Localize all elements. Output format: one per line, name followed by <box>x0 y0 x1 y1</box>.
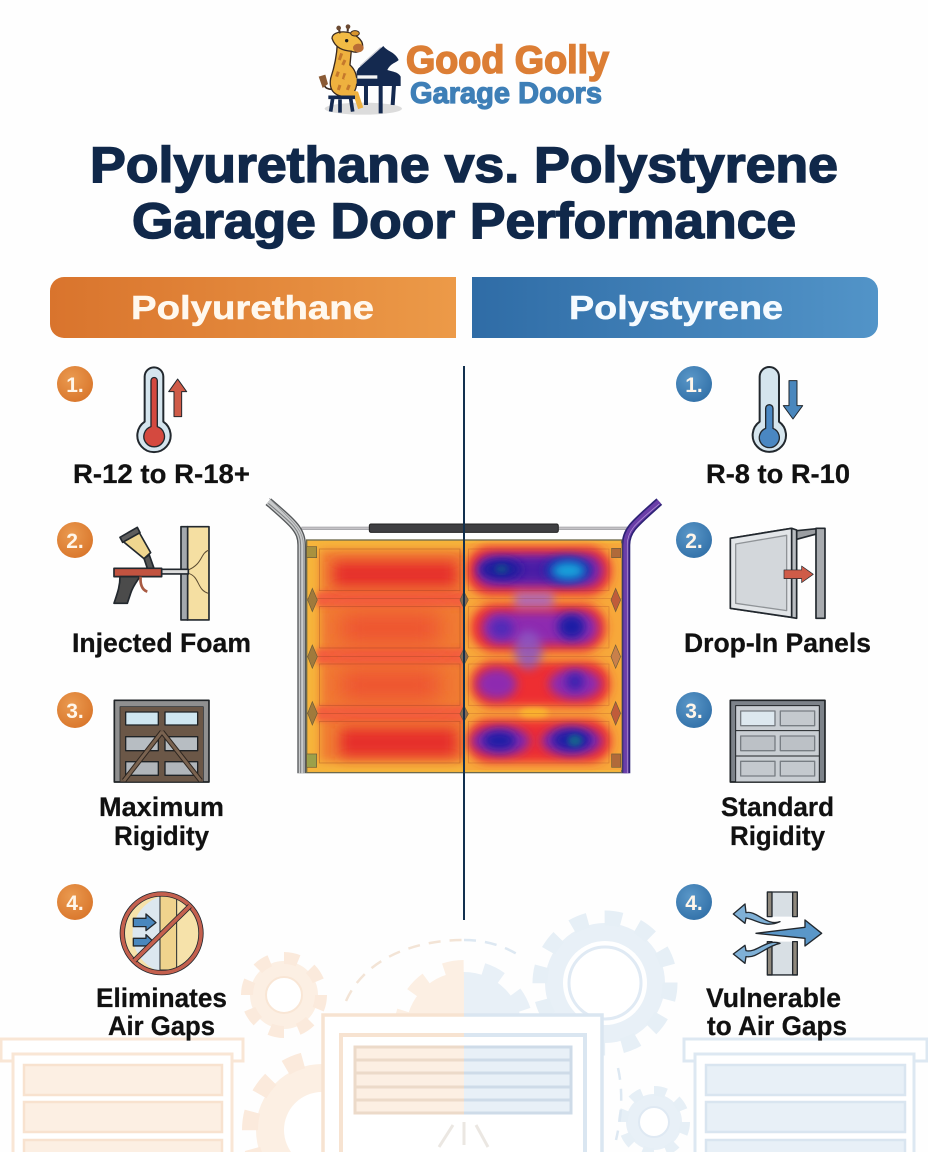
label: Standard <box>721 792 834 822</box>
item: injected foam <box>57 522 251 658</box>
badge 1 <box>676 366 712 402</box>
badge 3: 3. <box>685 700 703 723</box>
label: R-8 to R-10 <box>706 459 850 489</box>
icon: reinforced door <box>114 700 209 782</box>
garage door: centre <box>323 1015 602 1152</box>
label <box>99 792 224 851</box>
badge 3: 3. <box>66 700 84 723</box>
garage door: right <box>684 1039 927 1152</box>
item: maximum rigidity <box>57 692 224 851</box>
right track <box>626 502 659 773</box>
badge 4: 4. <box>685 892 703 915</box>
left track <box>268 498 303 773</box>
item: eliminates air gaps <box>57 884 227 1041</box>
gear: centre half orange half blue <box>401 967 527 1093</box>
label: Maximum <box>99 792 224 822</box>
label: R-12 to R-18+ <box>73 459 250 489</box>
icon: giraffe at piano <box>319 24 402 115</box>
header: Polystyrene <box>472 277 878 338</box>
thermal garage door <box>268 498 659 773</box>
title <box>90 136 838 249</box>
badge 2 <box>57 522 93 558</box>
label: Rigidity <box>730 821 825 851</box>
badge 4 <box>676 884 712 920</box>
badge 4: 4. <box>66 892 84 915</box>
icon: no air gaps <box>122 894 201 973</box>
title: Polyurethane vs. Polystyrene <box>90 136 838 193</box>
label: Drop-In Panels <box>684 628 871 658</box>
logo: Good Golly Garage Doors <box>319 24 609 115</box>
gear: lower orange <box>250 1058 394 1152</box>
label: to Air Gaps <box>707 1011 847 1041</box>
badge 2: 2. <box>685 530 703 553</box>
gear: large blue <box>540 918 670 1048</box>
item: polyurethane R-value <box>57 366 250 489</box>
logo wordmark: Good Golly <box>406 39 609 82</box>
left half heat <box>306 545 463 768</box>
icon: thermometer down <box>753 367 803 452</box>
header: Polyurethane <box>50 277 456 338</box>
item: standard rigidity <box>676 692 834 851</box>
badge 3 <box>676 692 712 728</box>
title: Garage Door Performance <box>132 192 796 249</box>
badge 1: 1. <box>685 374 703 397</box>
badge 2 <box>676 522 712 558</box>
gear: small blue <box>623 1091 685 1152</box>
badge 3 <box>57 692 93 728</box>
door base <box>307 540 622 773</box>
header: Polyurethane: Polyurethane <box>131 289 374 326</box>
logo: Good Golly Garage Doors: Garage Doors <box>410 77 602 110</box>
divider line <box>463 366 465 920</box>
badge 1: 1. <box>66 374 84 397</box>
top spring bar <box>302 524 628 532</box>
hinges and corner brackets <box>307 547 621 767</box>
icon: thermometer up <box>137 367 187 452</box>
badge 1 <box>57 366 93 402</box>
label <box>96 983 227 1041</box>
label: Rigidity <box>114 821 209 851</box>
label: Vulnerable <box>706 983 841 1013</box>
label <box>706 983 847 1041</box>
header: Polystyrene: Polystyrene <box>569 289 783 326</box>
right half heat <box>464 543 622 770</box>
badge 4 <box>57 884 93 920</box>
garage door: left <box>1 1039 243 1152</box>
icon: drop-in panel <box>730 528 825 618</box>
label: Air Gaps <box>108 1011 215 1041</box>
item: drop-in panels <box>676 522 871 658</box>
item: polystyrene R-value <box>676 366 850 489</box>
item: vulnerable to air gaps <box>676 884 847 1041</box>
icon: air leaking through gap <box>733 892 822 975</box>
label <box>721 792 834 851</box>
label: Injected Foam <box>72 628 251 658</box>
background: gears and garage doors <box>1 918 927 1152</box>
icon: standard door <box>730 700 825 782</box>
label: Eliminates <box>96 983 227 1013</box>
badge 2: 2. <box>66 530 84 553</box>
gear: small orange <box>247 958 321 1032</box>
icon: foam injection gun <box>114 527 209 620</box>
dashed arcs <box>346 940 621 1140</box>
